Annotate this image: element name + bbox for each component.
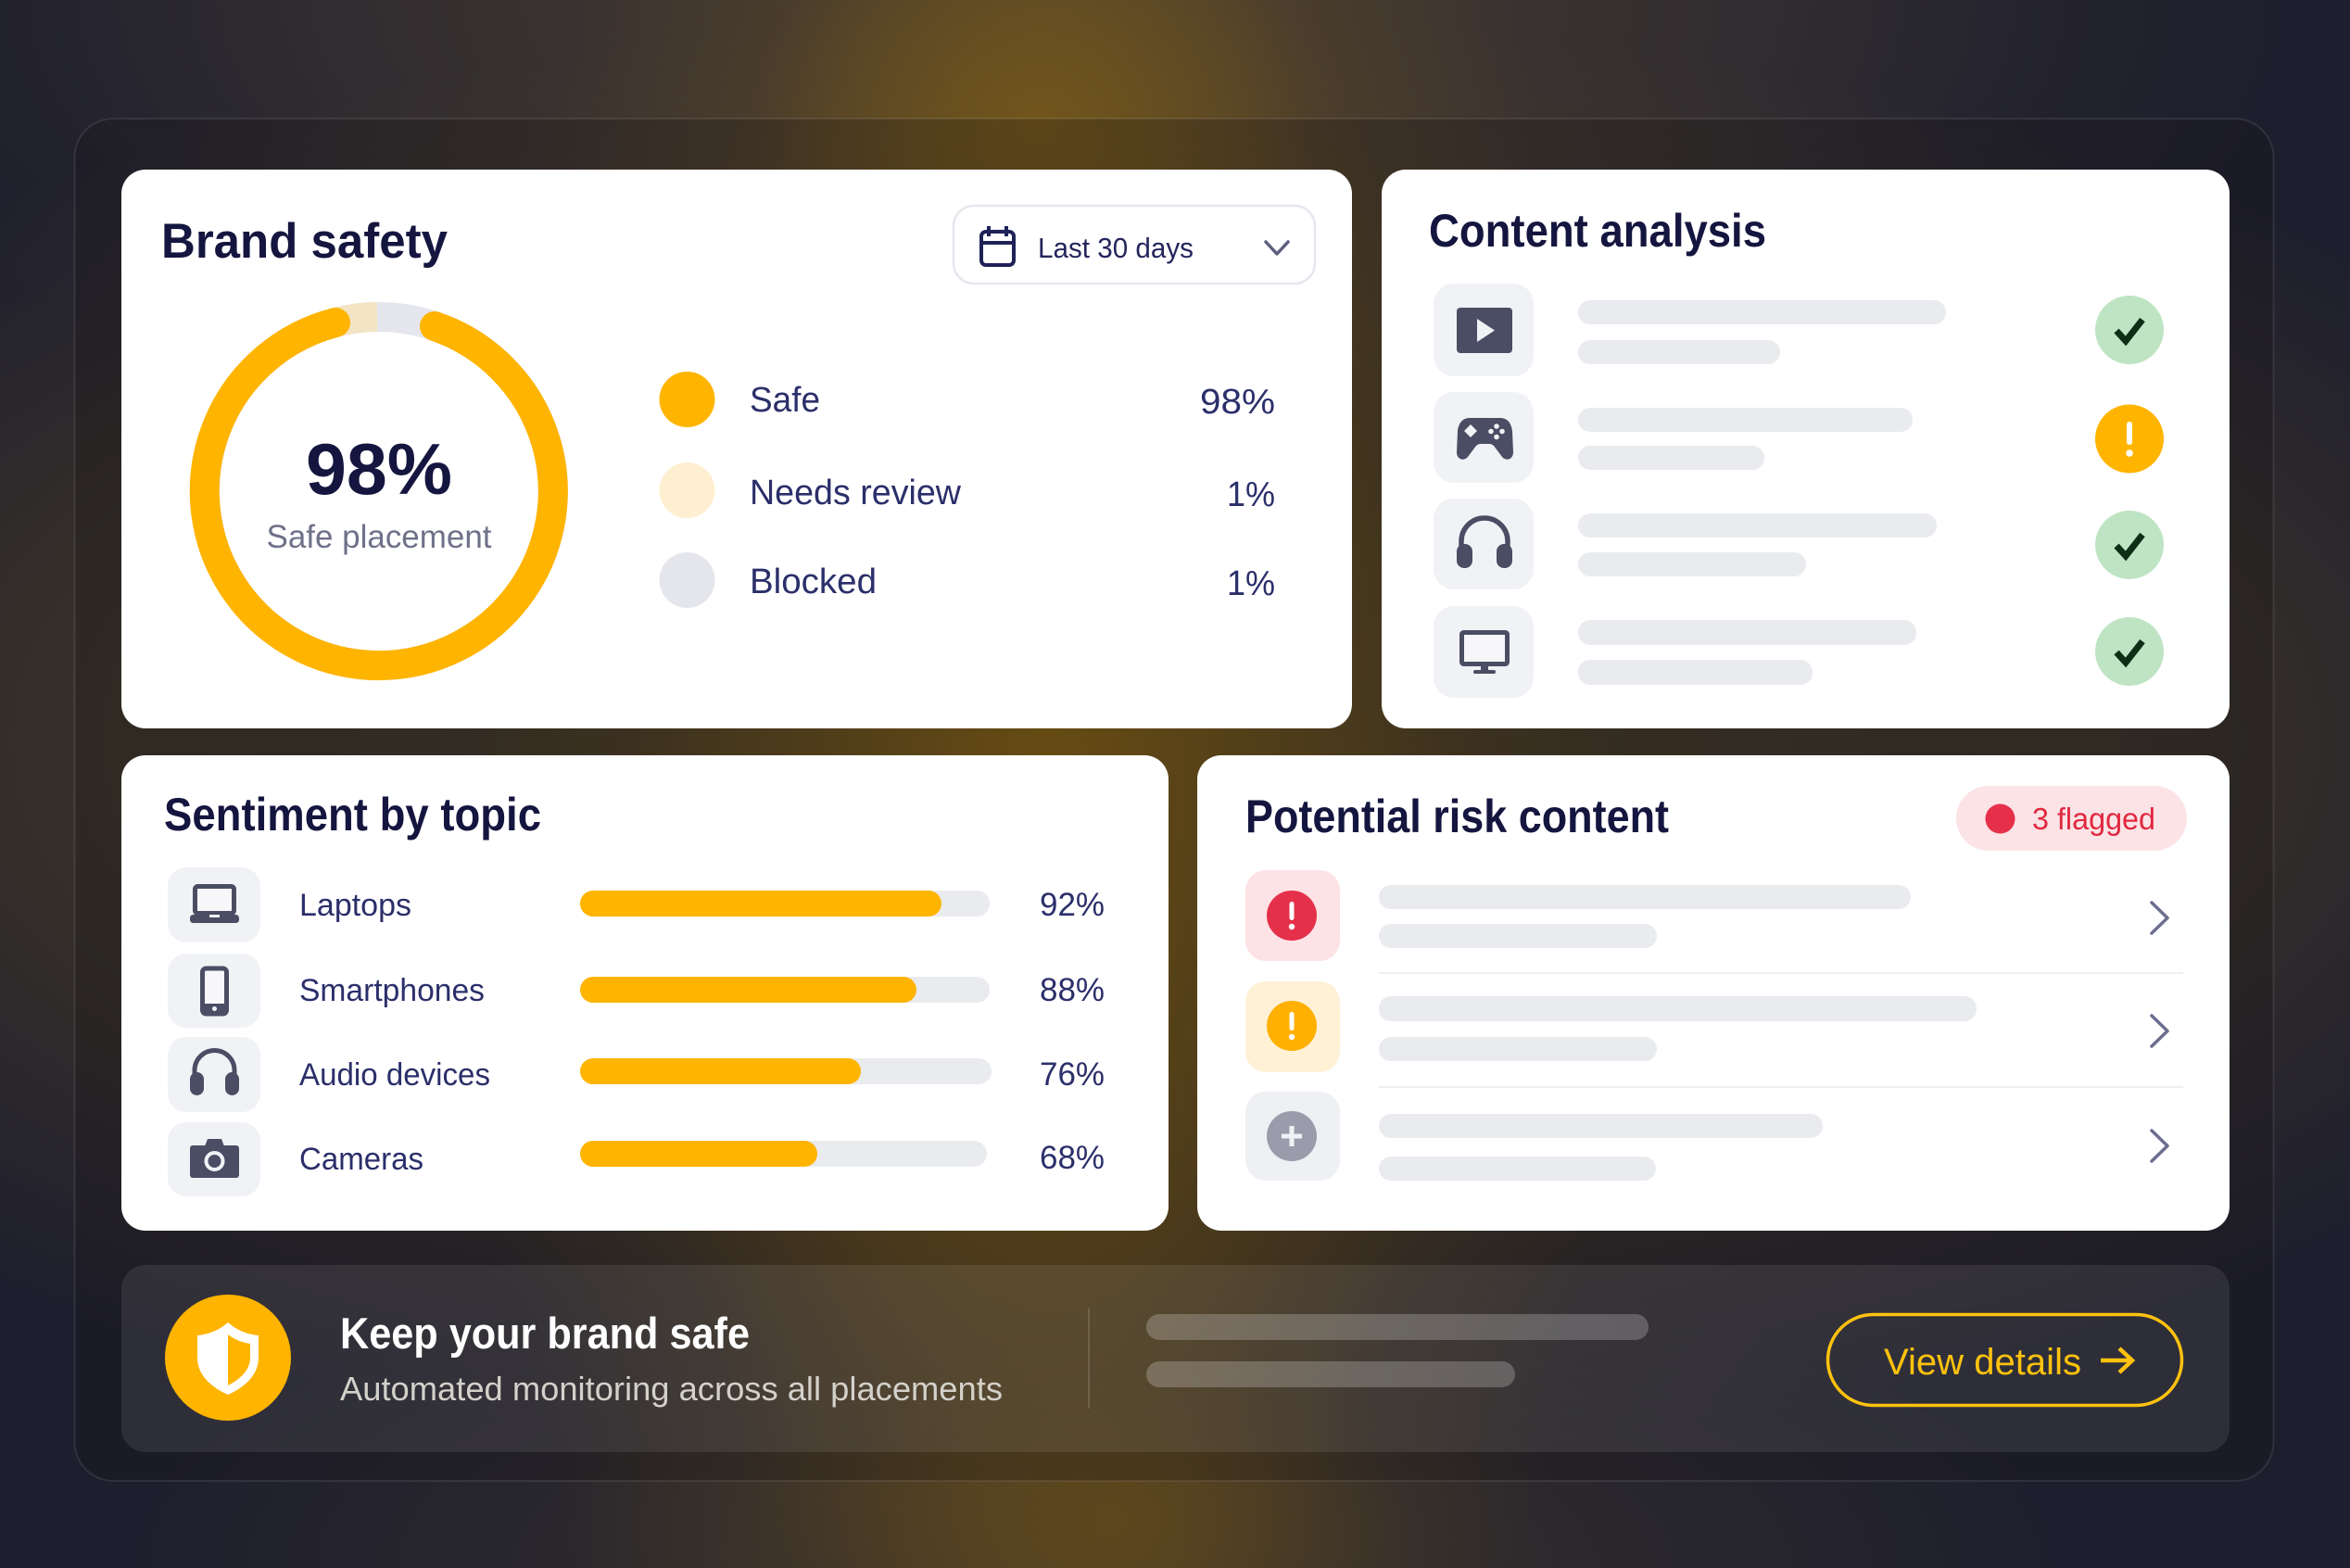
panel: content analysis [1382, 170, 2230, 728]
row: audio devices [168, 1037, 1105, 1112]
icon: arrow [2101, 1348, 2132, 1372]
row: laptops [168, 867, 1105, 942]
dropdown label: Last 30 days [1038, 232, 1194, 264]
heading: sentiment by topic: Sentiment by topic [164, 789, 541, 841]
heading: potential risk content: Potential risk content [1245, 790, 1669, 842]
legend: safe: Safe [750, 381, 820, 420]
row: laptops: 92% [1040, 887, 1105, 923]
row: display [1434, 606, 2164, 698]
legend: safe: 98% [1200, 383, 1275, 422]
view details button: View details [1884, 1342, 2081, 1383]
legend: needs review: 1% [1227, 475, 1275, 514]
heading: brand safety: Brand safety [161, 214, 448, 269]
row: laptops: Laptops [299, 888, 411, 923]
row: games [1434, 392, 2164, 483]
icon: calendar [981, 226, 1014, 265]
row: high risk [1245, 870, 2167, 961]
panel: sentiment by topic [121, 755, 1169, 1231]
legend: safe [660, 372, 1275, 427]
row: cameras: 68% [1040, 1140, 1105, 1176]
view details button [1827, 1314, 2181, 1405]
panel: potential risk content [1197, 755, 2230, 1231]
panel: call to action banner [121, 1265, 2230, 1452]
row: smartphones: Smartphones [299, 973, 485, 1008]
legend: blocked: 1% [1227, 564, 1275, 603]
row: low risk [1245, 1092, 2167, 1181]
legend: blocked: Blocked [750, 563, 877, 601]
banner heading: Keep your brand safe [340, 1309, 750, 1358]
donut chart [205, 317, 553, 665]
flagged badge: 3 flagged [2032, 802, 2155, 836]
donut caption: Safe placement [267, 519, 492, 555]
row: cameras: Cameras [299, 1142, 423, 1177]
row: video [1434, 284, 2164, 376]
row: audio devices: 76% [1040, 1056, 1105, 1093]
panel: brand safety [121, 170, 1352, 728]
row: cameras [168, 1122, 1105, 1196]
date range dropdown [954, 206, 1315, 284]
legend: needs review: Needs review [750, 474, 962, 512]
row: audio [1434, 499, 2164, 589]
flagged badge [1956, 786, 2187, 851]
legend: needs review [660, 462, 1275, 518]
donut value: 98% [306, 428, 452, 510]
legend: blocked [660, 552, 1275, 608]
row: audio devices: Audio devices [299, 1057, 490, 1093]
row: smartphones: 88% [1040, 972, 1105, 1008]
row: smartphones [168, 954, 1105, 1028]
row: medium risk [1245, 981, 2167, 1072]
heading: content analysis: Content analysis [1429, 205, 1766, 257]
icon: shield badge [165, 1295, 291, 1421]
placeholder lines [1146, 1314, 1649, 1387]
icon: chevron down [1266, 242, 1288, 254]
banner subtext: Automated monitoring across all placements [340, 1370, 1003, 1408]
